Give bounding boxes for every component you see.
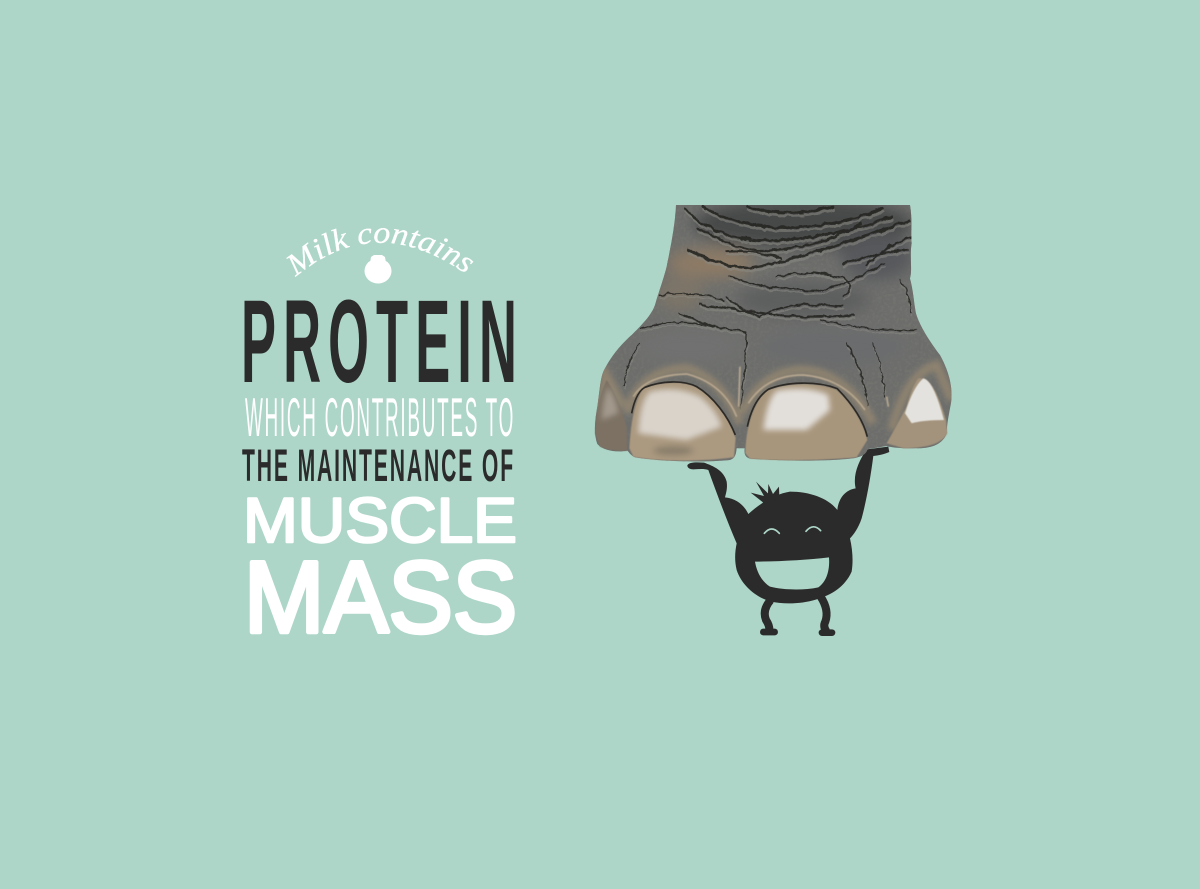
nail outline shadow (632, 382, 735, 435)
tan skin around toes (600, 365, 952, 430)
nail highlight (763, 389, 830, 430)
nail base (629, 383, 736, 461)
text block: headline stack (241, 228, 524, 654)
infographic canvas: PROTEIN (241, 276, 524, 408)
character: smiling strongman (687, 447, 889, 636)
nail base (745, 384, 867, 460)
illustration: character lifting elephant foot (595, 198, 952, 636)
pale cuticle lines (633, 367, 888, 417)
character legs (765, 597, 827, 632)
character hair (751, 482, 779, 504)
nail base (887, 378, 947, 448)
toenail: centre left (629, 382, 736, 461)
text: mass: MASS (244, 542, 517, 654)
highlights on folds (624, 210, 917, 411)
character eyes (764, 527, 821, 533)
character body and arms (687, 447, 889, 603)
nail highlight (905, 378, 944, 423)
foot skin (595, 205, 952, 461)
nail base shadow (653, 446, 693, 455)
text: muscle: MUSCLE (243, 486, 517, 556)
nail highlight (602, 387, 618, 420)
infographic canvas: THE MAINTENANCE OF (242, 440, 515, 491)
toenail: far right (887, 378, 947, 448)
toenail: centre right (745, 383, 867, 460)
nail base (595, 380, 627, 451)
photo: elephant foot (595, 198, 952, 461)
nail highlight (638, 389, 722, 440)
infographic canvas (242, 205, 952, 636)
infographic canvas: WHICH CONTRIBUTES TO (245, 386, 515, 448)
icon: kettlebell (364, 255, 392, 284)
skin shading, folds and cuticles (600, 198, 952, 430)
dark skin folds (623, 207, 917, 408)
arched script: Milk contains: Milk contains (286, 228, 474, 277)
character feet (760, 629, 835, 636)
nail outline shadow (747, 383, 867, 437)
colour shading (657, 205, 912, 319)
toenail: far left (595, 380, 627, 451)
